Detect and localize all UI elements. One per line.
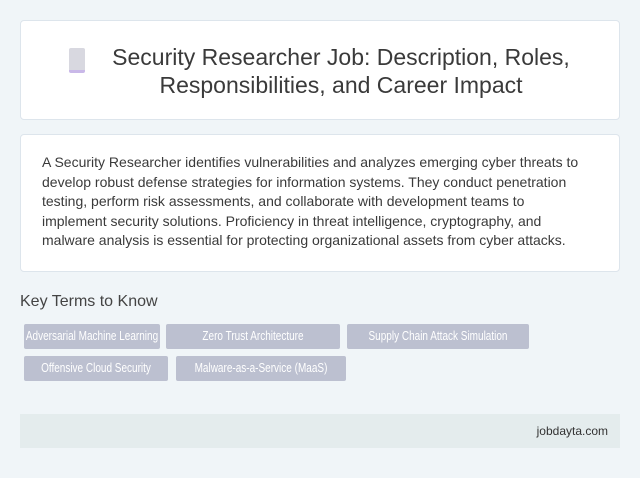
- icon: document: [69, 48, 85, 73]
- description card: [20, 134, 620, 272]
- key terms tags: Malware-as-a-Service (MaaS): [195, 361, 327, 375]
- description text: A Security Researcher identifies vulnerabilities and analyzes emerging cyber threats to develop robust defense strategies for information systems. They conduct penetration testing, perform risk assessments, and collaborate with development teams to implement security solutions. Proficiency in threat intelligence, cryptography, and malware analysis is essential for protecting organizational assets from cyber attacks.: [42, 154, 578, 248]
- footer: [20, 414, 620, 448]
- key terms tags: [24, 324, 529, 381]
- key terms tags: Adversarial Machine Learning: [26, 329, 158, 343]
- title card: [20, 20, 620, 120]
- key terms heading: Key Terms to Know: [20, 293, 158, 310]
- title: Security Researcher Job: Description, Roles, Responsibilities, and Career Impact: [112, 44, 570, 98]
- key terms tags: Zero Trust Architecture: [202, 329, 304, 343]
- footer source: jobdayta.com: [537, 424, 608, 438]
- key terms tags: Offensive Cloud Security: [41, 361, 151, 375]
- key terms tags: Supply Chain Attack Simulation: [369, 329, 507, 343]
